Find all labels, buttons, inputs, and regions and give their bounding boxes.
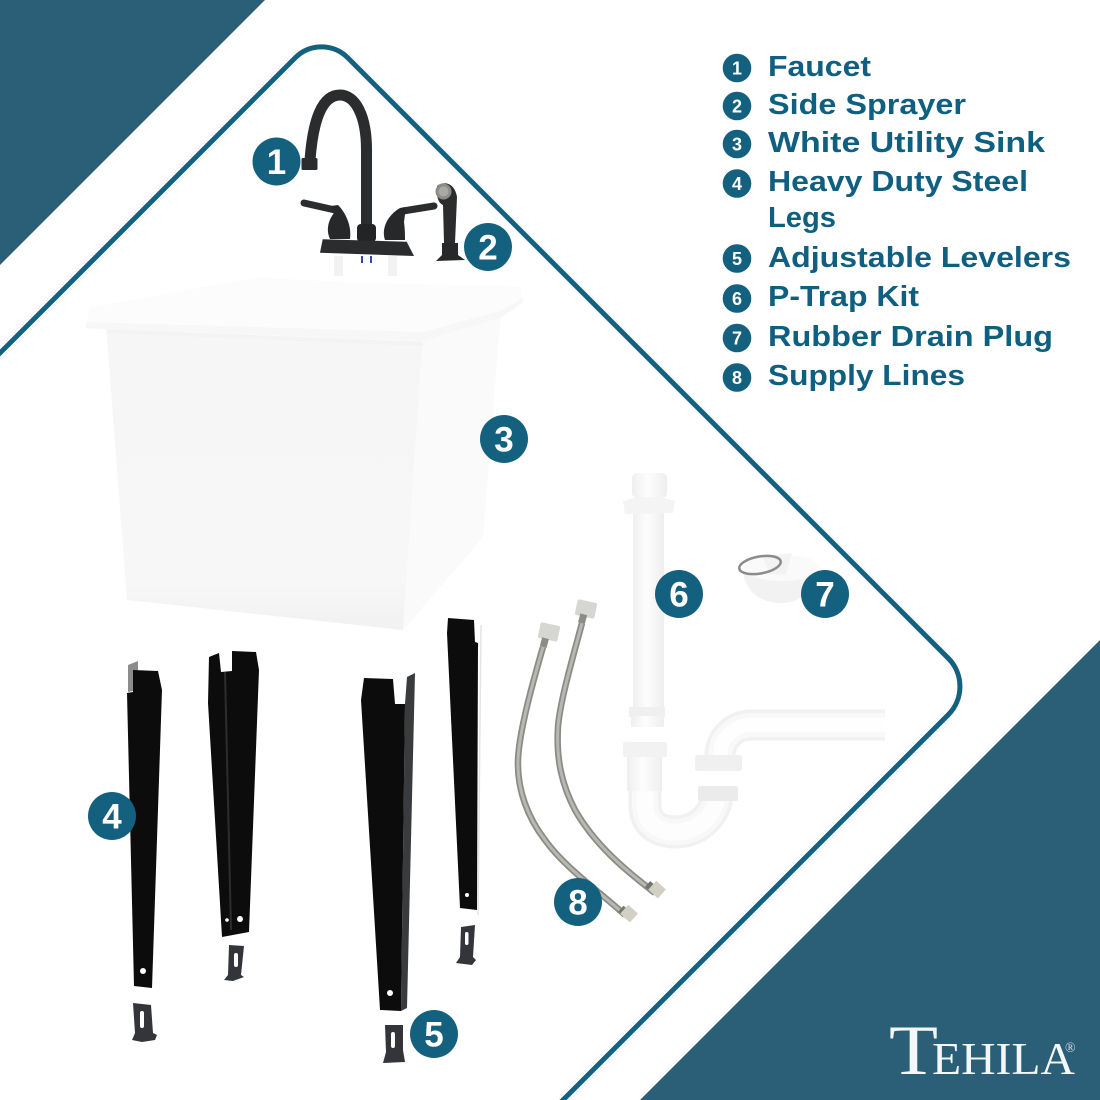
leveler foot: front right <box>383 1025 405 1063</box>
corner banner: top left <box>0 0 265 265</box>
legend: parts list <box>723 51 1071 392</box>
rubber drain plug <box>738 553 820 603</box>
legend item 3: White Utility Sink <box>768 127 1045 159</box>
callout badge 5: 5 <box>424 1016 444 1054</box>
callout badge 1: 1 <box>267 143 286 182</box>
legend item 7: 7 <box>732 328 742 348</box>
callout badge 5 <box>410 1010 458 1058</box>
faucet <box>302 95 434 276</box>
supply line: back <box>558 599 666 898</box>
callout badge 4 <box>88 792 136 840</box>
legend item 8: Supply Lines <box>768 360 965 392</box>
legend item 6: 6 <box>732 289 742 309</box>
brand logo: T <box>889 1012 938 1090</box>
callout badge 8 <box>554 878 602 926</box>
brand logo: EHILA <box>932 1033 1075 1084</box>
legend item 6: P-Trap Kit <box>768 281 920 313</box>
legend item 3: 3 <box>732 134 742 154</box>
callout badge 1 <box>252 138 300 186</box>
leveler foot: back right <box>456 925 476 965</box>
corner banner: bottom right <box>640 640 1100 1100</box>
legend item 1 <box>723 51 872 83</box>
callout badge 3 <box>480 415 528 463</box>
side sprayer <box>436 183 465 261</box>
legend item 5: Adjustable Levelers <box>768 242 1071 274</box>
steel leg: back right <box>447 618 481 915</box>
callout badge 3: 3 <box>494 420 514 460</box>
callout badge 7: 7 <box>815 576 835 614</box>
callout badge 7 <box>801 570 849 618</box>
supply line: front <box>518 622 638 922</box>
legend item 4: Legs <box>768 202 836 234</box>
legend item 7: Rubber Drain Plug <box>768 321 1053 353</box>
callout badge 2: 2 <box>478 228 498 268</box>
callout badge 2 <box>464 223 512 271</box>
leveler foot: back left <box>224 945 244 981</box>
legend item 6 <box>723 281 920 313</box>
callout badge 4: 4 <box>102 798 122 836</box>
legend item 5: 5 <box>732 249 742 269</box>
callout badge 6: 6 <box>669 576 689 614</box>
legend item 4 <box>723 166 1028 234</box>
steel leg: front right <box>361 673 415 1011</box>
utility sink <box>86 279 523 630</box>
legend item 1: Faucet <box>768 51 872 83</box>
steel leg: back left <box>208 651 259 937</box>
callout badge 8: 8 <box>568 884 588 922</box>
legend item 2: 2 <box>732 96 742 116</box>
legend item 4: 4 <box>732 174 742 194</box>
legend item 4: Heavy Duty Steel <box>768 166 1028 198</box>
callout badge 6 <box>655 570 703 618</box>
legend item 1: 1 <box>732 58 742 78</box>
brand logo: ® <box>1065 1041 1076 1056</box>
leveler foot: left <box>132 1003 157 1042</box>
steel leg: left <box>127 661 162 988</box>
p-trap kit <box>623 473 885 832</box>
legend item 8: 8 <box>732 368 742 388</box>
brand logo <box>889 1012 1076 1090</box>
legend item 2: Side Sprayer <box>768 89 966 121</box>
